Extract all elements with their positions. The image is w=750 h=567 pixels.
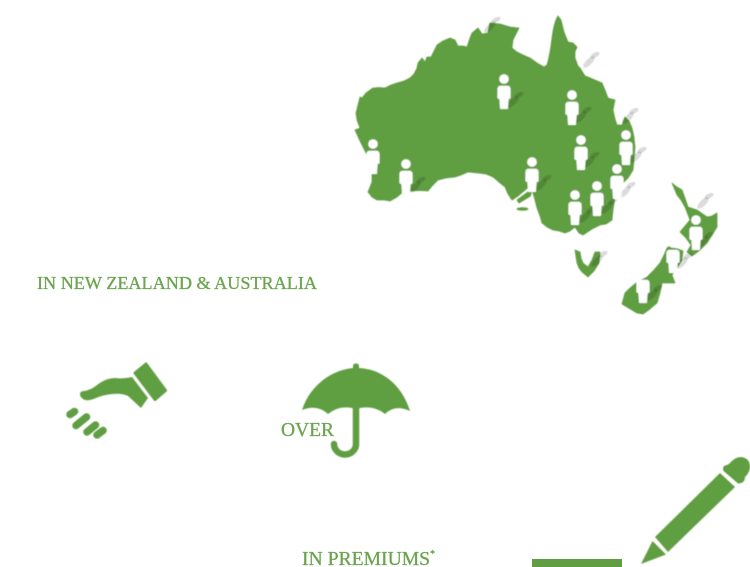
icon: pen <box>641 457 750 564</box>
handle <box>334 409 356 454</box>
label: over: OVER <box>281 419 335 441</box>
cuff <box>135 364 166 400</box>
map: Australia and New Zealand <box>355 16 717 314</box>
icon: umbrella <box>302 364 410 454</box>
pen cap <box>723 457 750 484</box>
canopy <box>302 364 410 414</box>
Kangaroo Island <box>516 207 528 211</box>
landmass: New Zealand North Island <box>672 183 717 256</box>
pen barrel <box>655 473 735 552</box>
landmass: New Zealand South Island <box>622 246 683 314</box>
pen tip <box>641 541 666 564</box>
signature line <box>532 559 622 567</box>
icon: hand <box>70 364 166 435</box>
fingers <box>70 412 103 435</box>
people markers <box>366 74 703 303</box>
heading: in New Zealand & Australia: IN NEW ZEALAND & AUSTRALIA <box>37 273 317 293</box>
label: in premiums: * <box>430 549 435 560</box>
landmass: Tasmania <box>575 250 600 277</box>
palm <box>80 377 148 408</box>
leaf shadows <box>408 16 715 302</box>
landmass: Australia <box>355 16 635 235</box>
